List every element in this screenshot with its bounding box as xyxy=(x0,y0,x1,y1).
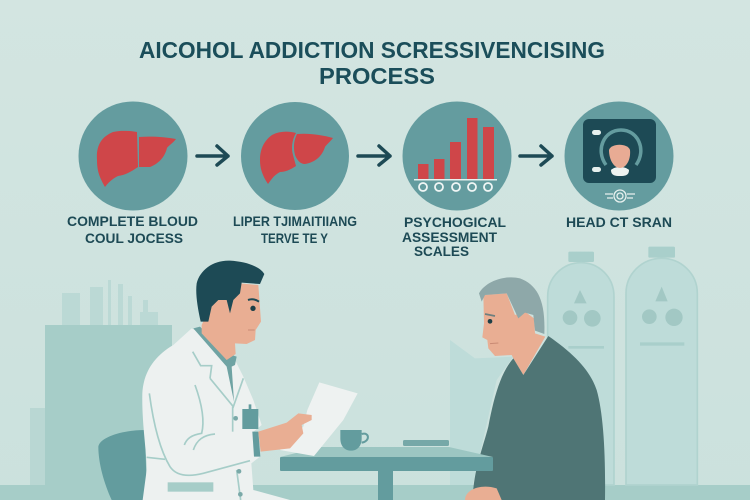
folder behind patient xyxy=(450,340,513,485)
facial features xyxy=(485,314,498,344)
step 3: psychological assessment scales xyxy=(402,102,512,259)
step 1: complete blood count xyxy=(67,102,198,246)
icon: liver in circle xyxy=(78,102,188,210)
label xyxy=(402,214,506,259)
table xyxy=(280,440,493,500)
coat pocket xyxy=(168,482,213,492)
label xyxy=(67,213,198,246)
hand xyxy=(258,413,312,452)
cuff xyxy=(252,432,260,457)
label: COUL JOCESS xyxy=(85,230,183,246)
chair xyxy=(98,430,185,500)
badge xyxy=(242,404,258,429)
background: floor xyxy=(0,485,750,500)
title: AICOHOL ADDICTION SCRESSIVENCISING xyxy=(139,37,605,63)
neck and face xyxy=(482,293,545,375)
label: SCALES xyxy=(414,243,469,259)
patient hand xyxy=(465,487,502,500)
paper xyxy=(280,382,358,456)
icon: liver in circle xyxy=(241,102,349,210)
neck and face xyxy=(202,283,261,360)
patient xyxy=(450,277,605,500)
label: LIPER TJIMAITIIANG xyxy=(233,213,357,229)
label: PSYCHOGICAL xyxy=(404,214,506,230)
arrow 2 xyxy=(358,146,390,165)
lab coat xyxy=(142,328,290,500)
icon: CT scan monitor in circle xyxy=(564,102,674,210)
icon: bar chart in circle xyxy=(402,102,512,210)
shirt and collar xyxy=(193,327,237,402)
background: oxygen bottles xyxy=(548,247,697,485)
hair xyxy=(196,261,264,322)
label xyxy=(233,213,357,246)
coat lines xyxy=(147,352,250,500)
doctor xyxy=(98,261,368,500)
arrow 1 xyxy=(197,146,228,165)
hair xyxy=(479,277,544,334)
step 2: liver function test xyxy=(233,102,357,246)
arrow 3 xyxy=(520,146,552,165)
label: COMPLETE BLOUD xyxy=(67,213,198,229)
title: PROCESS xyxy=(319,63,435,89)
bottle 1 xyxy=(548,252,614,485)
title xyxy=(139,37,605,89)
background: cabinet and lab shelf xyxy=(30,280,172,500)
step 4: head CT scan xyxy=(564,102,674,230)
bottle 2 xyxy=(626,247,697,485)
label: HEAD CT SRAN xyxy=(566,214,672,230)
dark sweater xyxy=(473,336,605,500)
label: TERVE TE Y xyxy=(261,230,329,246)
coat buttons xyxy=(233,416,243,497)
facial features xyxy=(248,299,259,330)
coffee cup xyxy=(340,430,368,451)
label: ASSESSMENT xyxy=(402,229,497,245)
